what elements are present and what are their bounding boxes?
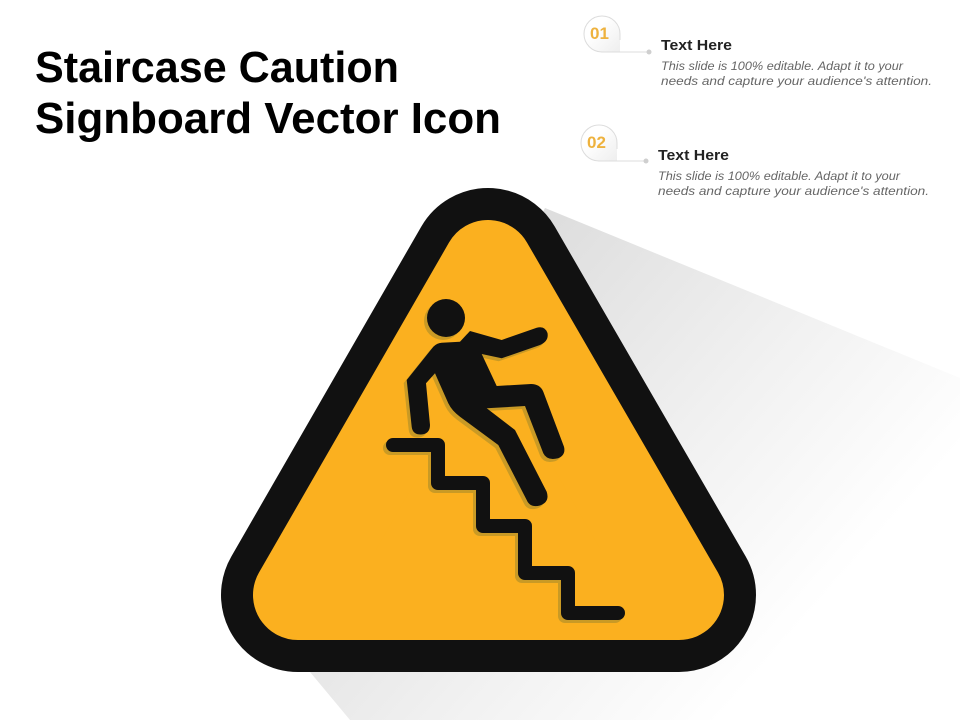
title: [35, 43, 501, 143]
body 01: [661, 61, 932, 88]
pictogram shadow: [390, 302, 615, 616]
badge 01: [584, 16, 652, 54]
title: Staircase Caution: [35, 43, 399, 92]
sign border: [298, 265, 679, 595]
body 01: This slide is 100% editable. Adapt it to your: [661, 61, 904, 73]
long shadow: [300, 208, 960, 720]
badge 02: [581, 125, 648, 164]
title: Signboard Vector Icon: [35, 94, 501, 143]
sign face: [298, 265, 679, 595]
heading 01: Text Here: [661, 38, 732, 54]
badge 01: 01: [590, 24, 609, 43]
item 01: [584, 16, 932, 88]
badge 02: 02: [587, 133, 606, 152]
body 02: needs and capture your audience's attention.: [658, 186, 929, 198]
body 02: [658, 171, 929, 198]
warning sign: [298, 265, 679, 616]
body 01: needs and capture your audience's attention.: [661, 76, 932, 88]
heading 02: Text Here: [658, 148, 729, 164]
item 02: [581, 125, 929, 198]
falling person and stairs pictogram: [393, 299, 618, 613]
body 02: This slide is 100% editable. Adapt it to your: [658, 171, 901, 183]
